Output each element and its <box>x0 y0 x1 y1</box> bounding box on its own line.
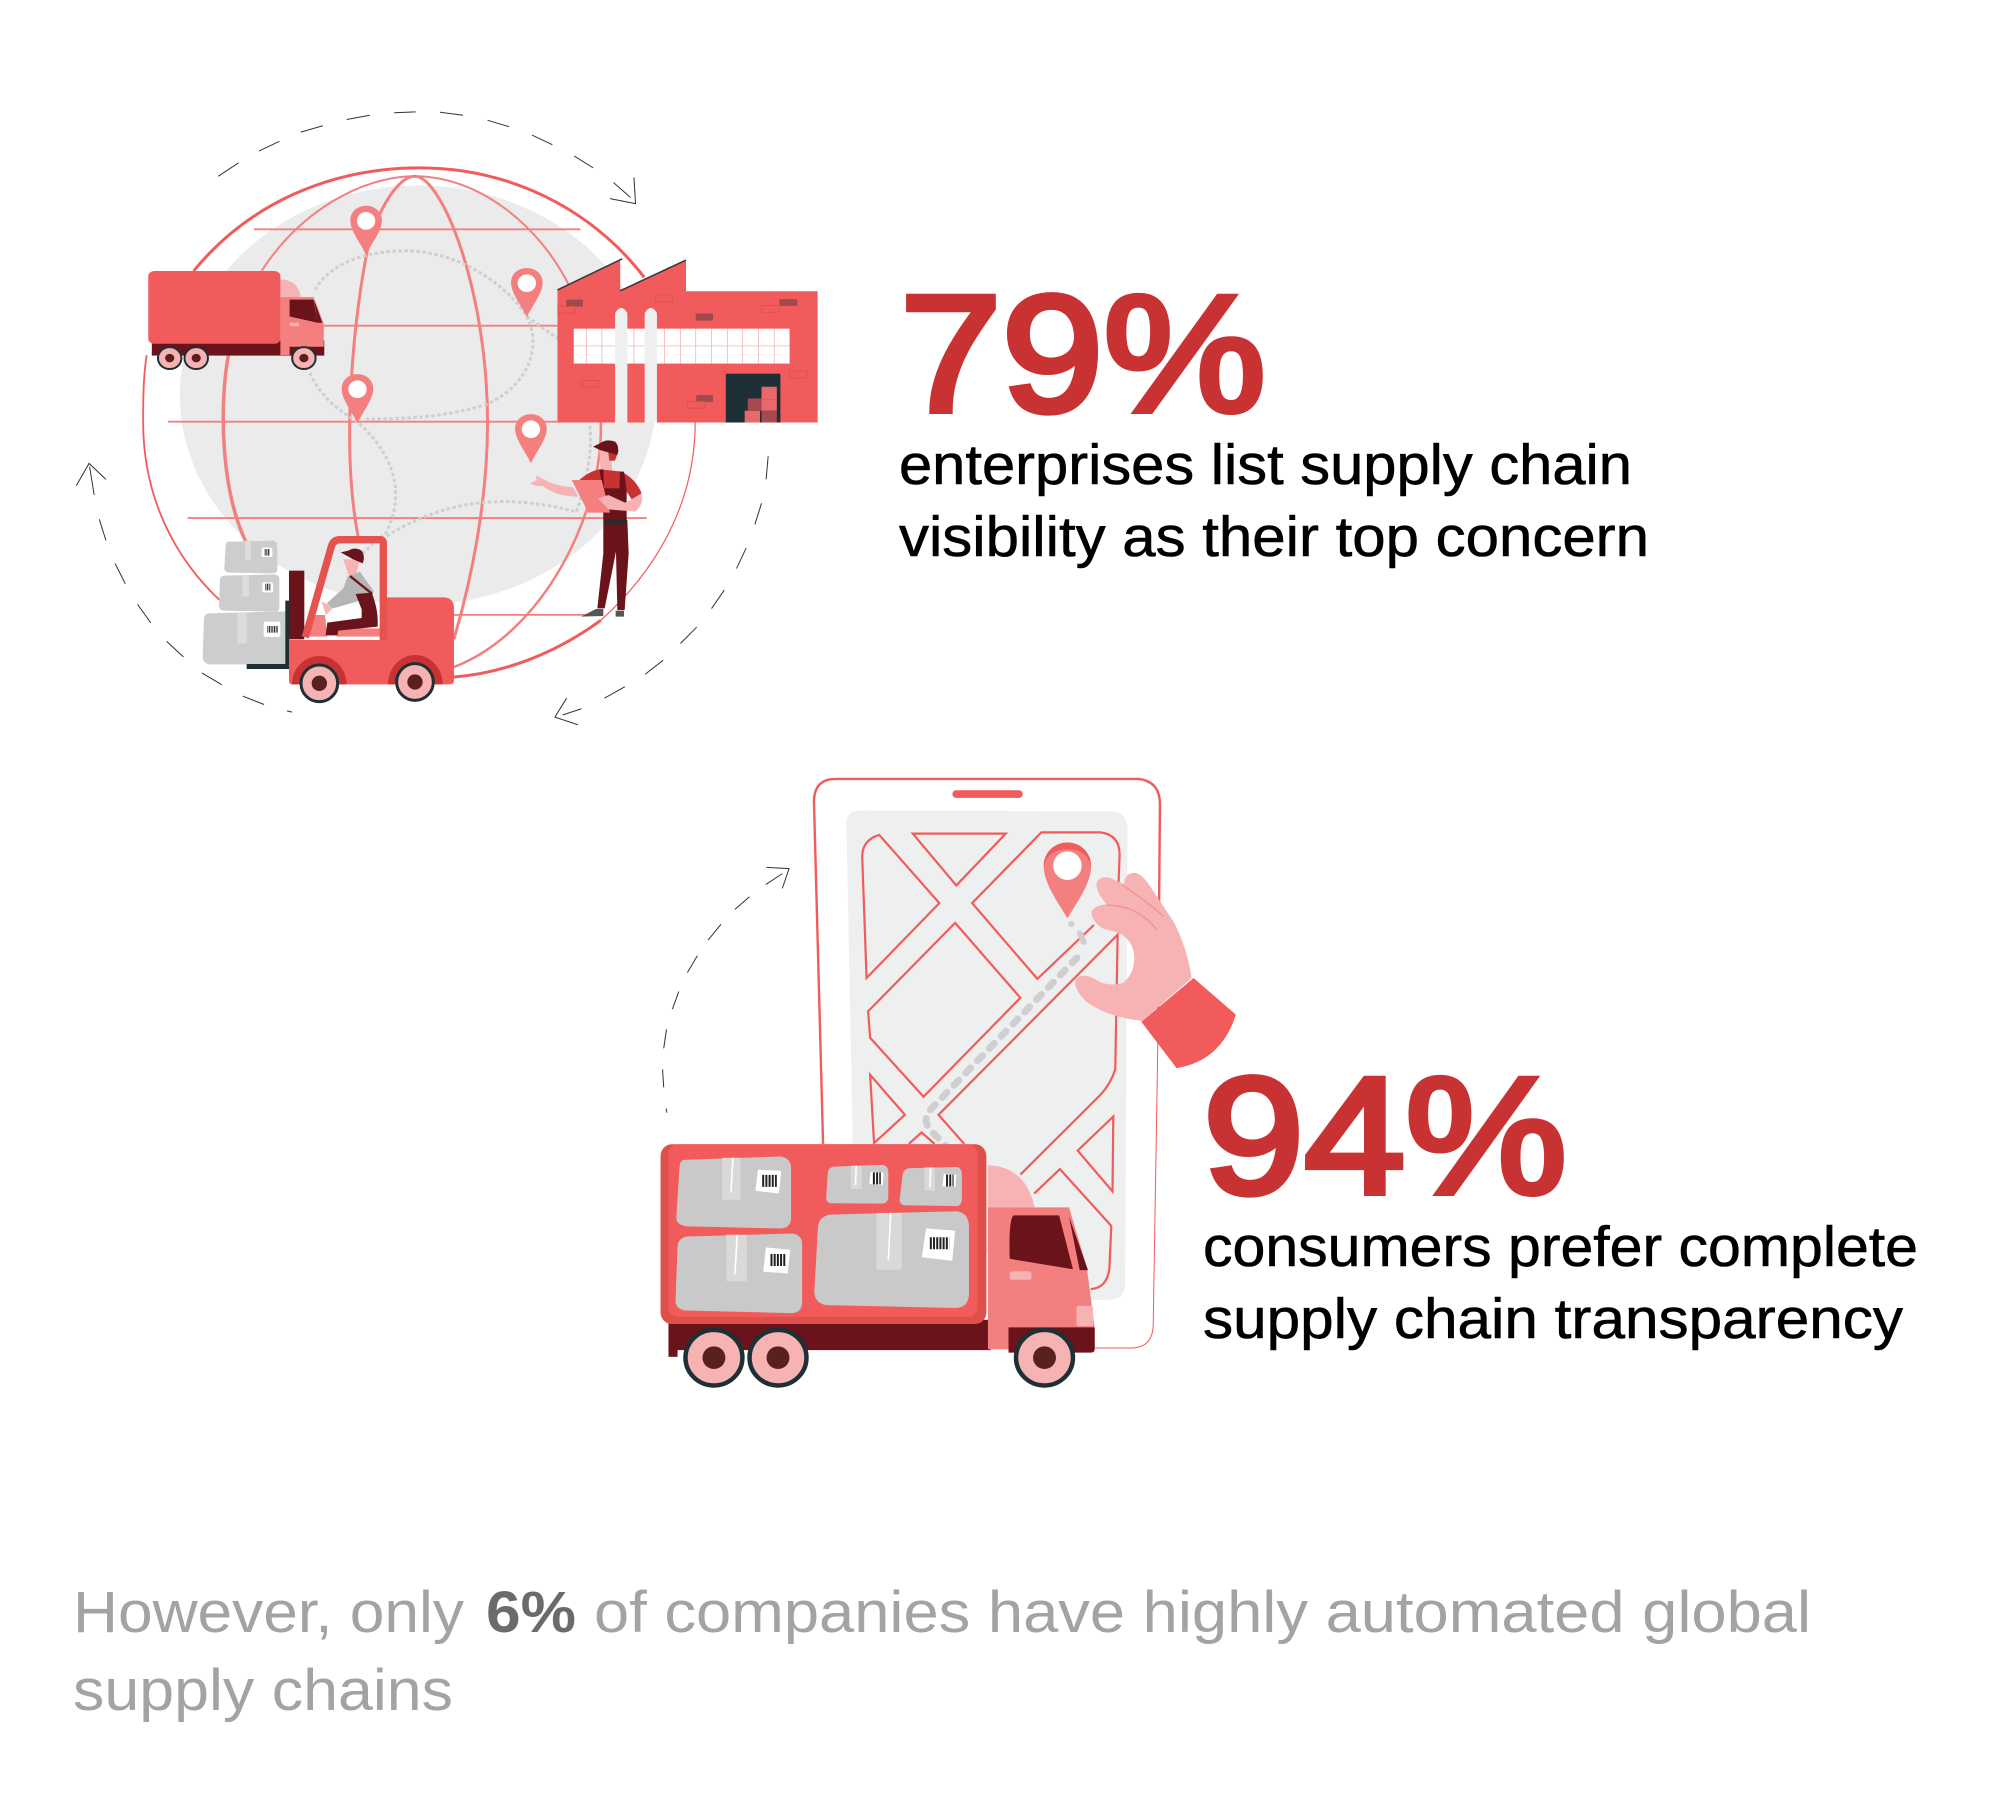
forklift with driver and boxes <box>203 540 454 702</box>
route start dots <box>1071 924 1084 942</box>
map pin 4 <box>515 414 547 463</box>
phone screen <box>846 811 1128 1300</box>
fork <box>247 601 289 669</box>
outer ring <box>143 168 695 677</box>
person: warehouse worker with clipboard <box>530 440 642 617</box>
footer line 1 start: However, only <box>73 1580 464 1645</box>
footer line 1 end: of companies have highly automated global <box>594 1580 1811 1645</box>
phone speaker <box>952 790 1023 798</box>
sleeve cuff <box>1141 978 1236 1068</box>
parcel barcodes <box>756 1170 956 1273</box>
map pin 2 <box>511 268 543 317</box>
stat: 94 percent <box>1203 1044 1918 1351</box>
footer note <box>73 1580 1811 1723</box>
stacked boxes <box>203 541 289 664</box>
parcel tape <box>722 1158 935 1281</box>
illustration: phone map with delivery truck <box>661 779 1236 1385</box>
driver <box>322 549 378 635</box>
location pin <box>1044 842 1091 918</box>
seat and console <box>305 615 382 637</box>
illustration: global logistics globe <box>76 112 818 725</box>
mast <box>289 571 304 639</box>
parcel tape highlights <box>731 1158 931 1274</box>
truck wheels <box>685 1330 742 1385</box>
forklift body <box>289 597 454 684</box>
globe with routes and pins <box>76 112 818 725</box>
grey globe disc <box>180 186 656 605</box>
text: consumers: consumers prefer complete <box>1203 1215 1918 1279</box>
phone outline <box>814 779 1160 1348</box>
globe meridians <box>223 176 601 667</box>
text: visibility: visibility as their top concern <box>899 505 1649 569</box>
stat: 79 percent <box>899 262 1649 569</box>
map pin 1 <box>350 206 382 255</box>
number 79%: 79% <box>900 262 1266 447</box>
dotted routes <box>310 251 590 557</box>
arrow: dashed arc to phone <box>663 867 789 1113</box>
globe latitude lines <box>168 229 647 615</box>
text: supply chain: supply chain transparency <box>1203 1287 1904 1351</box>
dashed delivery route <box>926 958 1077 1146</box>
footer highlight 6%: 6% <box>486 1580 576 1645</box>
footer line 2: supply chains <box>73 1658 453 1723</box>
text: enterprises: enterprises list supply chain <box>899 433 1632 497</box>
wheels <box>292 655 443 702</box>
factory building <box>557 259 818 423</box>
arrow: left dashed arc <box>76 463 292 712</box>
parcels <box>676 1156 969 1313</box>
map pin 3 <box>342 374 373 423</box>
delivery truck <box>661 1144 1095 1385</box>
cab <box>988 1165 1035 1207</box>
small delivery truck <box>148 271 324 369</box>
hand <box>1075 873 1192 1021</box>
barcodes on boxes <box>265 552 278 629</box>
arrow: right dashed arc <box>555 456 768 725</box>
map streets <box>862 832 1120 1289</box>
arrow: top dashed arc <box>218 112 636 204</box>
cab frame <box>305 540 383 640</box>
cargo box body <box>661 1144 986 1324</box>
number 94%: 94% <box>1203 1044 1567 1229</box>
